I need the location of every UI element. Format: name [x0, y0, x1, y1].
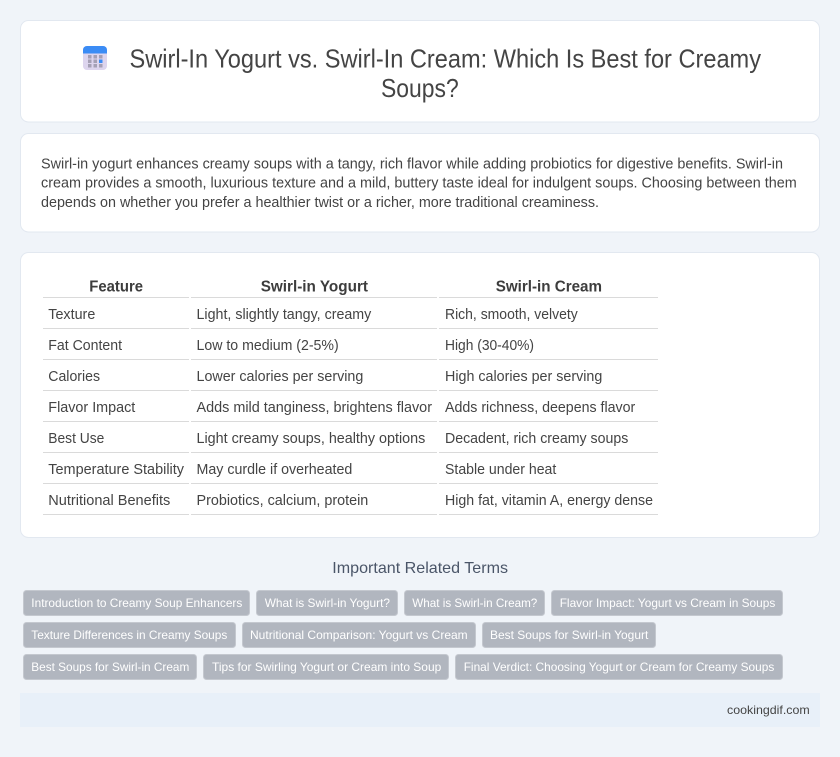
- tag: tips: Tips for Swirling Yogurt or Cream into Soup: [212, 660, 442, 674]
- row: flavor impact: [43, 400, 658, 422]
- tag: introduction: [24, 590, 250, 616]
- title: Swirl-In Yogurt vs. Swirl-In Cream: Which Is Best for Creamy: [130, 46, 761, 74]
- row: flavor impact: Flavor Impact: [48, 400, 135, 416]
- tag: nutritional comparison: Nutritional Comparison: Yogurt vs Cream: [250, 628, 468, 642]
- tag: final verdict: [456, 654, 782, 680]
- icon: calendar: [83, 46, 107, 70]
- panel: summary paragraph: [20, 134, 820, 232]
- row: temperature stability: May curdle if overheated: [196, 462, 352, 478]
- table header row: Feature: [89, 278, 143, 296]
- tag: flavor impact: Flavor Impact: Yogurt vs Cream in Soups: [560, 596, 775, 610]
- row: fat content: High (30-40%): [445, 338, 534, 354]
- panel: summary paragraph: Swirl-in yogurt enhances creamy soups with a tangy, rich flavor while adding probiotics for digestive benefits. Swirl-in: [41, 156, 783, 172]
- tag: best soups yogurt: [482, 622, 656, 648]
- tag: tips: [204, 654, 448, 680]
- panel: comparison table: [20, 252, 820, 538]
- row: texture: [43, 307, 658, 329]
- row: texture: Light, slightly tangy, creamy: [196, 307, 372, 323]
- row: fat content: Fat Content: [48, 338, 122, 354]
- row: fat content: Low to medium (2-5%): [196, 338, 339, 354]
- panel: related term tags: [24, 590, 782, 680]
- table header row: Swirl-in Yogurt: [261, 278, 369, 296]
- tag: best soups cream: Best Soups for Swirl-in Cream: [31, 660, 189, 674]
- row: nutritional benefits: Probiotics, calcium, protein: [196, 493, 368, 509]
- row: best use: Light creamy soups, healthy options: [196, 431, 425, 447]
- row: best use: Decadent, rich creamy soups: [445, 431, 628, 447]
- footer: [20, 693, 820, 727]
- footer: cookingdif.com: [727, 703, 810, 717]
- row: best use: Best Use: [48, 431, 104, 447]
- row: calories: High calories per serving: [445, 369, 602, 385]
- row: temperature stability: Temperature Stability: [48, 462, 185, 478]
- row: fat content: [43, 338, 658, 360]
- row: flavor impact: Adds mild tanginess, brightens flavor: [196, 400, 432, 416]
- row: best use: [43, 431, 658, 453]
- row: texture: Rich, smooth, velvety: [445, 307, 578, 323]
- tag: best soups cream: [24, 654, 196, 680]
- row: nutritional benefits: High fat, vitamin A, energy dense: [445, 493, 653, 509]
- tag: what is yogurt: [256, 590, 398, 616]
- panel: title header: [20, 20, 820, 122]
- tag: what is cream: What is Swirl-in Cream?: [412, 596, 538, 610]
- heading: important related terms: Important Related Terms: [332, 560, 508, 577]
- tag: what is cream: [404, 590, 544, 616]
- tag: what is yogurt: What is Swirl-in Yogurt?: [265, 596, 390, 610]
- tag: introduction: Introduction to Creamy Soup Enhancers: [31, 596, 242, 610]
- row: temperature stability: Stable under heat: [445, 462, 556, 478]
- tag: best soups yogurt: Best Soups for Swirl-in Yogurt: [490, 628, 649, 642]
- title: [130, 46, 761, 103]
- tag: texture differences: [24, 622, 236, 648]
- row: flavor impact: Adds richness, deepens flavor: [445, 400, 635, 416]
- row: temperature stability: [43, 462, 658, 484]
- row: calories: Calories: [48, 369, 100, 385]
- row: nutritional benefits: Nutritional Benefits: [48, 493, 170, 509]
- title: Soups?: [381, 75, 459, 103]
- table header row: Swirl-in Cream: [496, 278, 602, 296]
- tag: flavor impact: [552, 590, 782, 616]
- tag: nutritional comparison: [242, 622, 476, 648]
- row: calories: Lower calories per serving: [196, 369, 363, 385]
- panel: summary paragraph: depends on whether you prefer a healthier twist or a richer, more traditional creaminess.: [41, 195, 599, 211]
- row: calories: [43, 369, 658, 391]
- tag: texture differences: Texture Differences in Creamy Soups: [31, 628, 227, 642]
- tag: final verdict: Final Verdict: Choosing Yogurt or Cream for Creamy Soups: [464, 660, 774, 674]
- table header row: [43, 278, 658, 298]
- row: texture: Texture: [48, 307, 95, 323]
- row: nutritional benefits: [43, 493, 658, 515]
- panel: summary paragraph: cream provides a smooth, luxurious texture and a mild, buttery taste ideal for indulgent soups. Choosing between them: [41, 176, 797, 192]
